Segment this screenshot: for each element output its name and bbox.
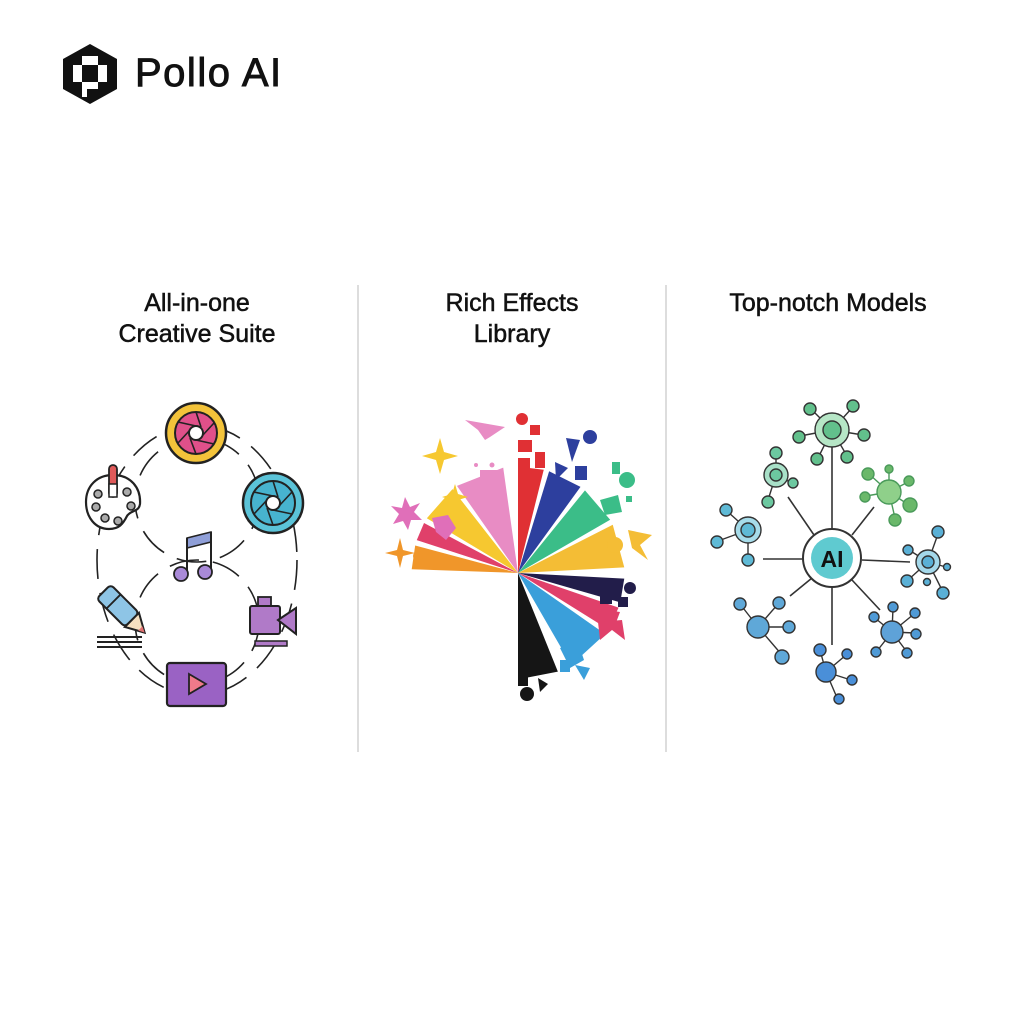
icon: paint palette: [86, 465, 140, 529]
fragments: [385, 413, 652, 701]
heading: All-in-one Creative Suite: Creative Suite: [118, 320, 276, 348]
heading: Rich Effects Library: [446, 289, 578, 348]
panel: creative suite illustration: [86, 403, 303, 706]
heading: All-in-one Creative Suite: All-in-one: [144, 289, 250, 317]
icon: music note: [174, 532, 212, 581]
panel: effects fan illustration: [385, 413, 652, 701]
heading: All-in-one Creative Suite: [118, 289, 276, 348]
icon: teal aperture: [243, 473, 303, 533]
heading: Top-notch Models: Top-notch Models: [729, 289, 927, 317]
AI hub: AI: [820, 546, 844, 572]
icon: pencil: [97, 585, 152, 647]
heading: Rich Effects Library: Rich Effects: [446, 289, 578, 317]
network clusters: [711, 400, 950, 704]
icon: yellow aperture: [166, 403, 226, 463]
logo: [63, 44, 283, 104]
AI hub: [803, 529, 861, 587]
panel: AI model network: [711, 400, 950, 704]
icon: video camera: [250, 597, 296, 646]
logo: Pollo AI: [135, 51, 283, 95]
icon: video play box: [167, 663, 226, 706]
heading: Rich Effects Library: Library: [474, 320, 550, 348]
